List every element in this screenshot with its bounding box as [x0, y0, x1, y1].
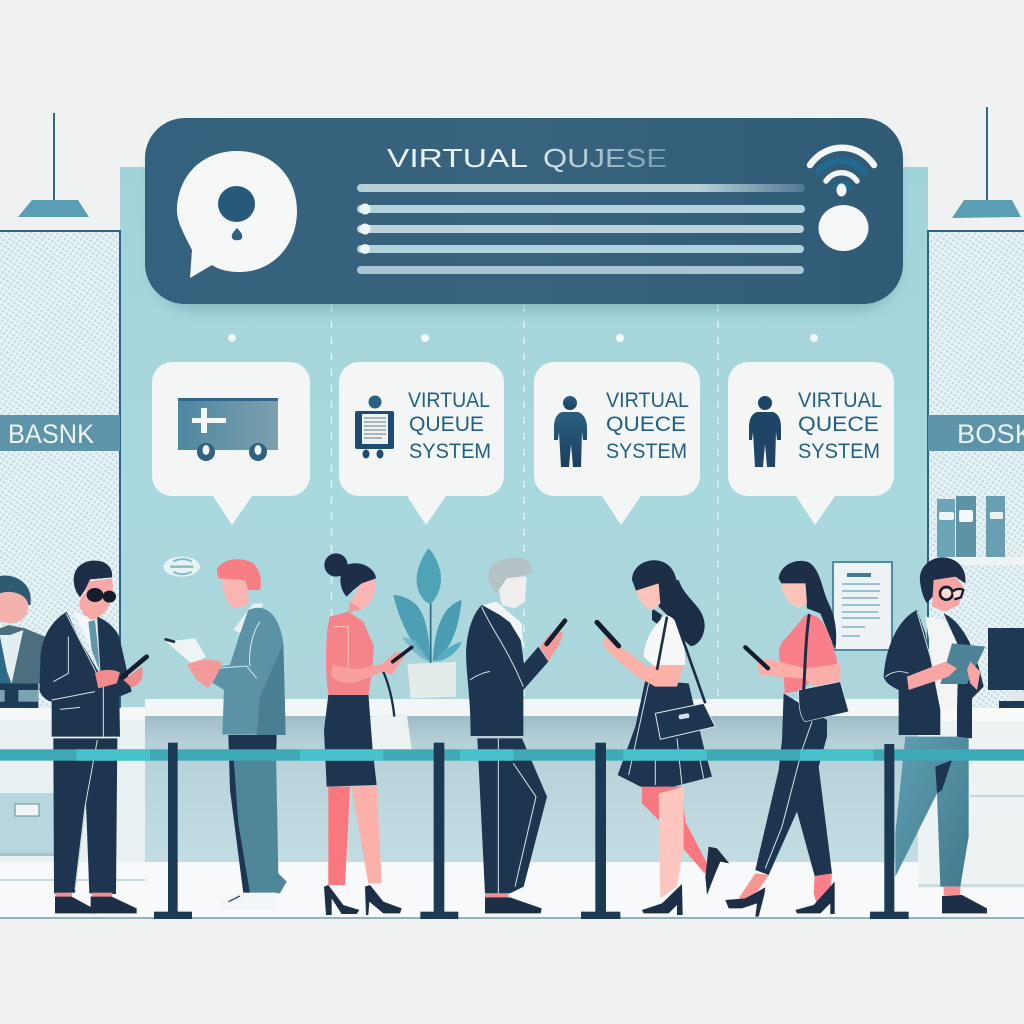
label: QUECE — [606, 413, 686, 436]
person 4: older man in suit — [466, 558, 565, 913]
left desk with clerk — [0, 576, 145, 881]
connector dots — [228, 334, 818, 342]
handbag — [655, 617, 715, 739]
rope — [0, 749, 1024, 761]
label: VIRTUAL — [408, 389, 490, 412]
person 3: woman with bun and red top — [324, 553, 412, 915]
clerk — [0, 576, 45, 708]
person 7: man with glasses and tablet — [884, 557, 987, 913]
post 2 — [420, 743, 458, 919]
person 1: man in suit with sunglasses — [39, 561, 147, 913]
lamp: right — [952, 107, 1021, 218]
queue list bars — [357, 184, 805, 274]
panel shadow — [150, 128, 902, 312]
card 1: van — [152, 362, 310, 525]
dashed dividers — [332, 305, 718, 700]
label: VIRTUAL — [606, 389, 689, 412]
title: VIRTUAL — [387, 143, 528, 173]
plant — [393, 548, 462, 698]
shelf with binders — [930, 496, 1024, 565]
rope highlights — [77, 749, 873, 761]
notice board — [833, 562, 892, 650]
shoulder bag — [799, 614, 849, 722]
left desk — [0, 708, 145, 881]
person 2: man with red hair reading paper — [166, 559, 287, 911]
icon: kiosk — [355, 396, 394, 458]
label: QUEUE — [409, 413, 484, 436]
monitor — [988, 628, 1024, 708]
icon: person — [749, 396, 781, 467]
label — [408, 389, 491, 463]
person 5: woman with skirt and handbag — [597, 560, 729, 915]
label: SYSTEM — [606, 440, 687, 463]
card 4: virtual queue system — [728, 362, 894, 525]
sign: BOSK — [928, 415, 1024, 451]
panel: left bank wall — [0, 231, 120, 711]
sign: BASNK: BASNK — [8, 419, 94, 449]
icon: speech bubble — [177, 151, 297, 278]
card 3: virtual queue system — [534, 362, 700, 525]
label: QUECE — [798, 413, 879, 436]
icon: wifi — [810, 148, 874, 196]
right desk — [918, 628, 1024, 888]
title — [387, 143, 667, 173]
sign: BASNK — [0, 415, 120, 451]
icon: van — [178, 398, 278, 461]
lamp: left — [18, 113, 89, 217]
small wall sign — [163, 557, 200, 577]
floor line — [0, 917, 1024, 919]
panel: central teal wall — [120, 167, 928, 707]
card 2: virtual queue system — [339, 362, 504, 525]
post 1 — [154, 743, 192, 919]
post 4 — [870, 744, 909, 919]
label: SYSTEM — [409, 440, 491, 463]
counter — [145, 699, 920, 862]
queue rope barrier — [0, 743, 1024, 919]
people in line — [39, 553, 987, 917]
panel: virtual queue display — [145, 118, 903, 304]
icon: person — [554, 396, 587, 467]
person 6: woman with red top and shoulder bag — [725, 561, 849, 917]
floor — [0, 862, 1024, 918]
status circle — [818, 205, 868, 251]
label — [606, 389, 689, 463]
label: VIRTUAL — [798, 389, 882, 412]
post 3 — [581, 743, 620, 919]
panel: right bank wall — [928, 231, 1024, 711]
label: SYSTEM — [798, 440, 880, 463]
label — [798, 389, 882, 463]
bag — [370, 672, 412, 749]
title: QUJESE — [543, 143, 667, 173]
